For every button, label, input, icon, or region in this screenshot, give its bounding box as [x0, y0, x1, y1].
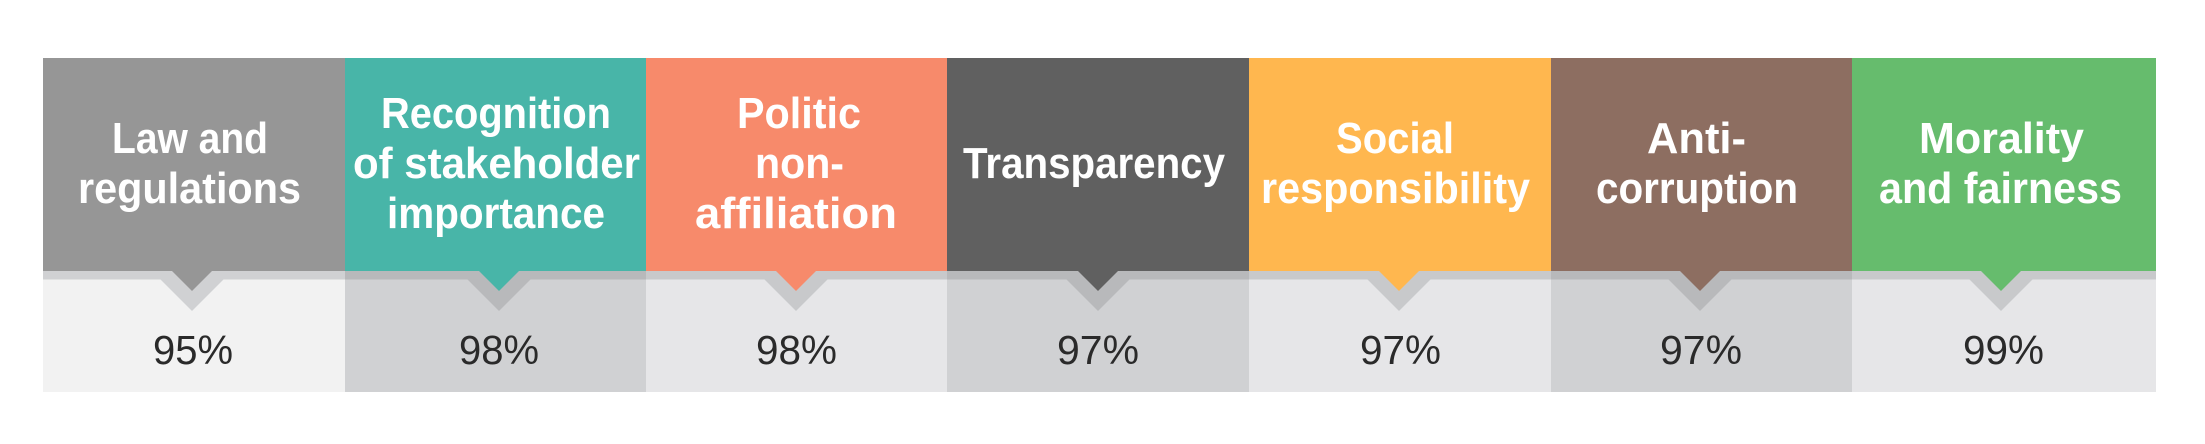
panel: politic non-affiliation [646, 58, 947, 392]
heading: law and regulations: regulations [78, 164, 301, 213]
heading: anti-corruption [1596, 114, 1798, 213]
heading: politic non-affiliation: affiliation [695, 189, 897, 238]
value: 95%: 95% [153, 327, 233, 373]
value: 97%: 97% [1057, 327, 1139, 373]
heading: social responsibility: Social [1336, 114, 1454, 163]
heading: transparency: Transparency [963, 139, 1225, 188]
value: 98%: 98% [756, 327, 837, 373]
heading: anti-corruption: Anti- [1647, 114, 1746, 163]
heading: social responsibility: responsibility [1261, 164, 1530, 213]
heading: recognition of stakeholder importance: Recognition [381, 89, 611, 138]
panel: recognition of stakeholder importance [345, 58, 646, 392]
heading: recognition of stakeholder importance [353, 89, 640, 238]
heading: politic non-affiliation [695, 89, 897, 238]
value: 99%: 99% [1963, 327, 2044, 373]
panel: morality and fairness [1852, 58, 2156, 392]
heading: morality and fairness [1879, 114, 2122, 213]
value: 97%: 97% [1360, 327, 1441, 373]
heading: politic non-affiliation: non- [755, 139, 844, 188]
heading: law and regulations: Law and [112, 114, 268, 163]
heading: politic non-affiliation: Politic [737, 89, 861, 138]
value: 97%: 97% [1660, 327, 1742, 373]
panel: anti-corruption [1551, 58, 1852, 392]
panel: transparency [947, 58, 1249, 392]
heading: morality and fairness: Morality [1919, 114, 2085, 163]
heading: social responsibility [1261, 114, 1530, 213]
value: 98%: 98% [459, 327, 539, 373]
panel: social responsibility [1249, 58, 1551, 392]
heading: morality and fairness: and fairness [1879, 164, 2122, 213]
heading: recognition of stakeholder importance: importance [387, 189, 605, 238]
heading: recognition of stakeholder importance: of stakeholder [353, 139, 640, 188]
heading: anti-corruption: corruption [1596, 164, 1798, 213]
panel: law and regulations [43, 58, 345, 392]
heading: law and regulations [78, 114, 301, 213]
